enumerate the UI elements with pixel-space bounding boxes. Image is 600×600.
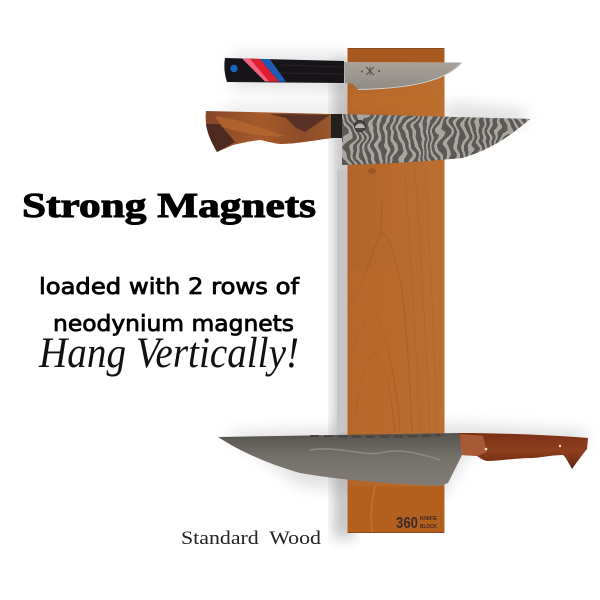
blade logo bbox=[361, 67, 380, 75]
handle bbox=[206, 111, 342, 152]
soft shadows bbox=[225, 52, 585, 538]
text: neodynium magnets: neodynium magnets bbox=[53, 312, 294, 337]
wood grain bbox=[349, 170, 437, 432]
brand mark: 360 knife block: BLOCK bbox=[420, 524, 437, 530]
damascus pattern bbox=[342, 114, 530, 165]
handle stripes bbox=[242, 58, 275, 82]
large chef knife bbox=[218, 433, 588, 486]
caption: Standard Wood: Standard Wood bbox=[181, 529, 322, 549]
handle bbox=[459, 433, 588, 469]
wooden knife block bbox=[348, 48, 444, 533]
blade bbox=[344, 62, 462, 90]
text: loaded with 2 rows of: loaded with 2 rows of bbox=[39, 275, 300, 300]
bolster bbox=[331, 114, 342, 138]
blade badge bbox=[354, 120, 366, 132]
damascus knife bbox=[206, 111, 530, 165]
blade bbox=[342, 114, 530, 165]
brand mark: 360 knife block bbox=[396, 515, 437, 532]
brand mark: 360 knife block: 360 bbox=[396, 515, 418, 532]
brand mark: 360 knife block: KNIFE bbox=[420, 516, 437, 522]
infographic canvas bbox=[24, 48, 588, 545]
small knife at top bbox=[224, 58, 462, 90]
handle bbox=[224, 58, 344, 83]
blade bbox=[218, 433, 462, 486]
script text: Hang Vertically!: Hang Vertically! bbox=[38, 330, 299, 377]
heading: Strong Magnets: Strong Magnets bbox=[22, 186, 316, 225]
